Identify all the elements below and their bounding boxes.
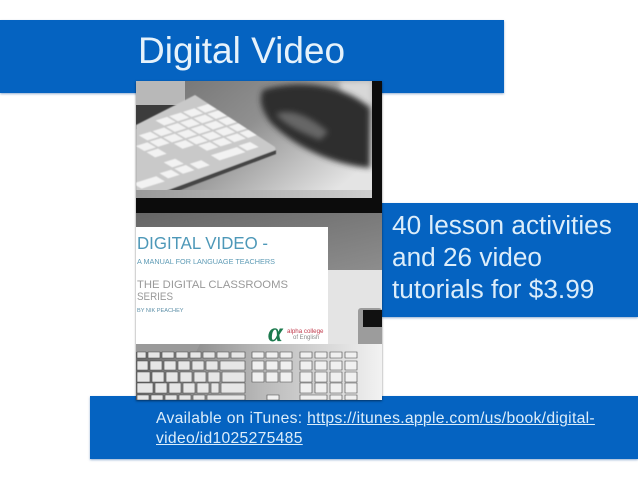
cover subtitle: A MANUAL FOR LANGUAGE TEACHERS [137, 257, 275, 266]
cover heading: DIGITAL VIDEO - [137, 233, 268, 253]
author: BY NIK PEACHEY [137, 308, 184, 314]
college logo [268, 317, 324, 347]
desk photo [136, 81, 382, 201]
series heading: THE DIGITAL CLASSROOMS [137, 279, 288, 291]
availability text [156, 410, 595, 446]
college logo: of English [293, 335, 319, 341]
cover title panel [136, 227, 328, 347]
callout text: tutorials for $3.99 [392, 274, 594, 304]
device [358, 308, 382, 347]
availability text: video/id1025275485 [156, 430, 303, 446]
title: Digital Video [138, 30, 345, 71]
callout text [392, 210, 612, 304]
right callout band [382, 203, 638, 317]
book cover image [134, 80, 384, 402]
college logo: alpha college [287, 328, 324, 335]
title band [0, 20, 504, 93]
lower keyboard [136, 344, 382, 400]
callout text: 40 lesson activities [392, 210, 612, 240]
white desk area [328, 270, 382, 344]
callout text: and 26 video [392, 242, 542, 272]
bottom band [90, 396, 638, 459]
college logo: α [268, 317, 284, 347]
series heading line 2: SERIES [137, 291, 173, 303]
black monitor edges [136, 81, 382, 213]
keyboard top [136, 94, 277, 190]
monitor lower area [136, 213, 382, 270]
toolbar strip [136, 190, 372, 198]
availability text: Available on iTunes: https://itunes.apple.com/us/book/digital- [156, 410, 595, 427]
